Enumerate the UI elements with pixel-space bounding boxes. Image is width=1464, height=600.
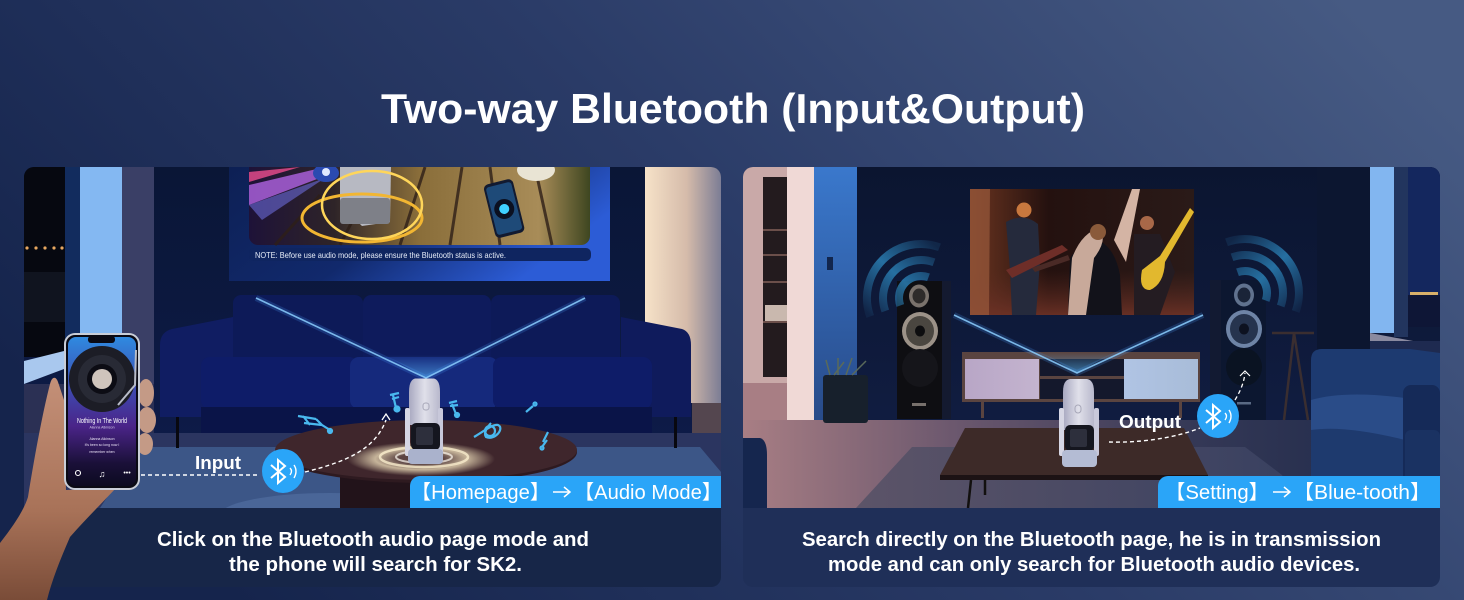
panel: output xyxy=(743,167,1440,587)
dashed arrow to projector xyxy=(305,414,390,472)
caption: Click on the Bluetooth audio page mode and xyxy=(157,529,589,551)
phone xyxy=(64,333,140,490)
phone: Alanna Atkinson xyxy=(89,426,115,430)
projector beam xyxy=(256,298,585,378)
floor xyxy=(743,383,787,420)
dashed line: phone to Bluetooth xyxy=(141,474,259,476)
sound waves: right speaker xyxy=(1226,239,1299,312)
phone: ••• xyxy=(123,470,131,477)
caption: mode and can only search for Bluetooth audio devices. xyxy=(828,554,1360,576)
panel background xyxy=(24,167,721,587)
phone: Nothing In The World xyxy=(77,418,127,425)
phone: It's been so long now I xyxy=(85,443,119,447)
potted plant xyxy=(823,358,868,423)
dashed arrow to speaker xyxy=(1235,371,1250,400)
caption: Search directly on the Bluetooth page, he is in transmission xyxy=(802,529,1381,551)
caption: the phone will search for SK2. xyxy=(229,554,522,576)
icon: Bluetooth xyxy=(1197,394,1239,438)
projector xyxy=(1059,379,1099,467)
coffee table xyxy=(940,428,1208,508)
label: Input: Input xyxy=(195,453,241,473)
panel background xyxy=(743,167,1440,587)
projector beam xyxy=(954,315,1203,373)
fingers xyxy=(137,379,156,455)
note bar: NOTE: Before use audio mode, please ensure the Bluetooth status is active. xyxy=(255,250,506,260)
left speaker xyxy=(897,281,951,419)
projected screen xyxy=(229,159,610,281)
floor and rug xyxy=(24,433,721,508)
scene: living room with speakers xyxy=(743,167,1440,508)
path badge xyxy=(1158,476,1440,508)
panel: input xyxy=(24,159,722,587)
sound waves: left speaker xyxy=(867,244,940,316)
doorway and shelves xyxy=(743,167,857,430)
path badge: 【Setting】 xyxy=(1165,482,1269,504)
sofa xyxy=(160,295,691,448)
hand xyxy=(0,378,116,600)
phone: ♫ xyxy=(99,469,105,479)
icon: Bluetooth xyxy=(262,449,304,493)
path badge: 【Blue-tooth】 xyxy=(1293,482,1431,504)
phone: remember when xyxy=(89,450,115,454)
hand holding phone xyxy=(0,333,156,600)
path badge: 【Audio Mode】 xyxy=(574,482,722,504)
scene: living room with sofa xyxy=(24,159,722,537)
TV unit xyxy=(962,352,1200,418)
armchair xyxy=(1311,349,1440,476)
dashed line: projector to Bluetooth xyxy=(1109,428,1200,442)
path badge xyxy=(410,476,722,508)
projector xyxy=(405,378,443,464)
note bar xyxy=(249,248,591,261)
right speaker xyxy=(1210,280,1266,420)
projected concert image xyxy=(970,189,1194,315)
rug xyxy=(856,447,1300,508)
side table xyxy=(1272,333,1314,420)
music notes xyxy=(298,393,548,450)
blue sofa corner xyxy=(743,438,767,508)
title: Two-way Bluetooth (Input&Output) xyxy=(381,85,1085,132)
path badge: 【Homepage】 xyxy=(411,482,550,504)
coffee table xyxy=(275,420,577,510)
right window and curtain xyxy=(1317,167,1440,353)
label: Output: Output xyxy=(1119,412,1181,432)
phone: Alanna Atkinson xyxy=(89,437,115,441)
